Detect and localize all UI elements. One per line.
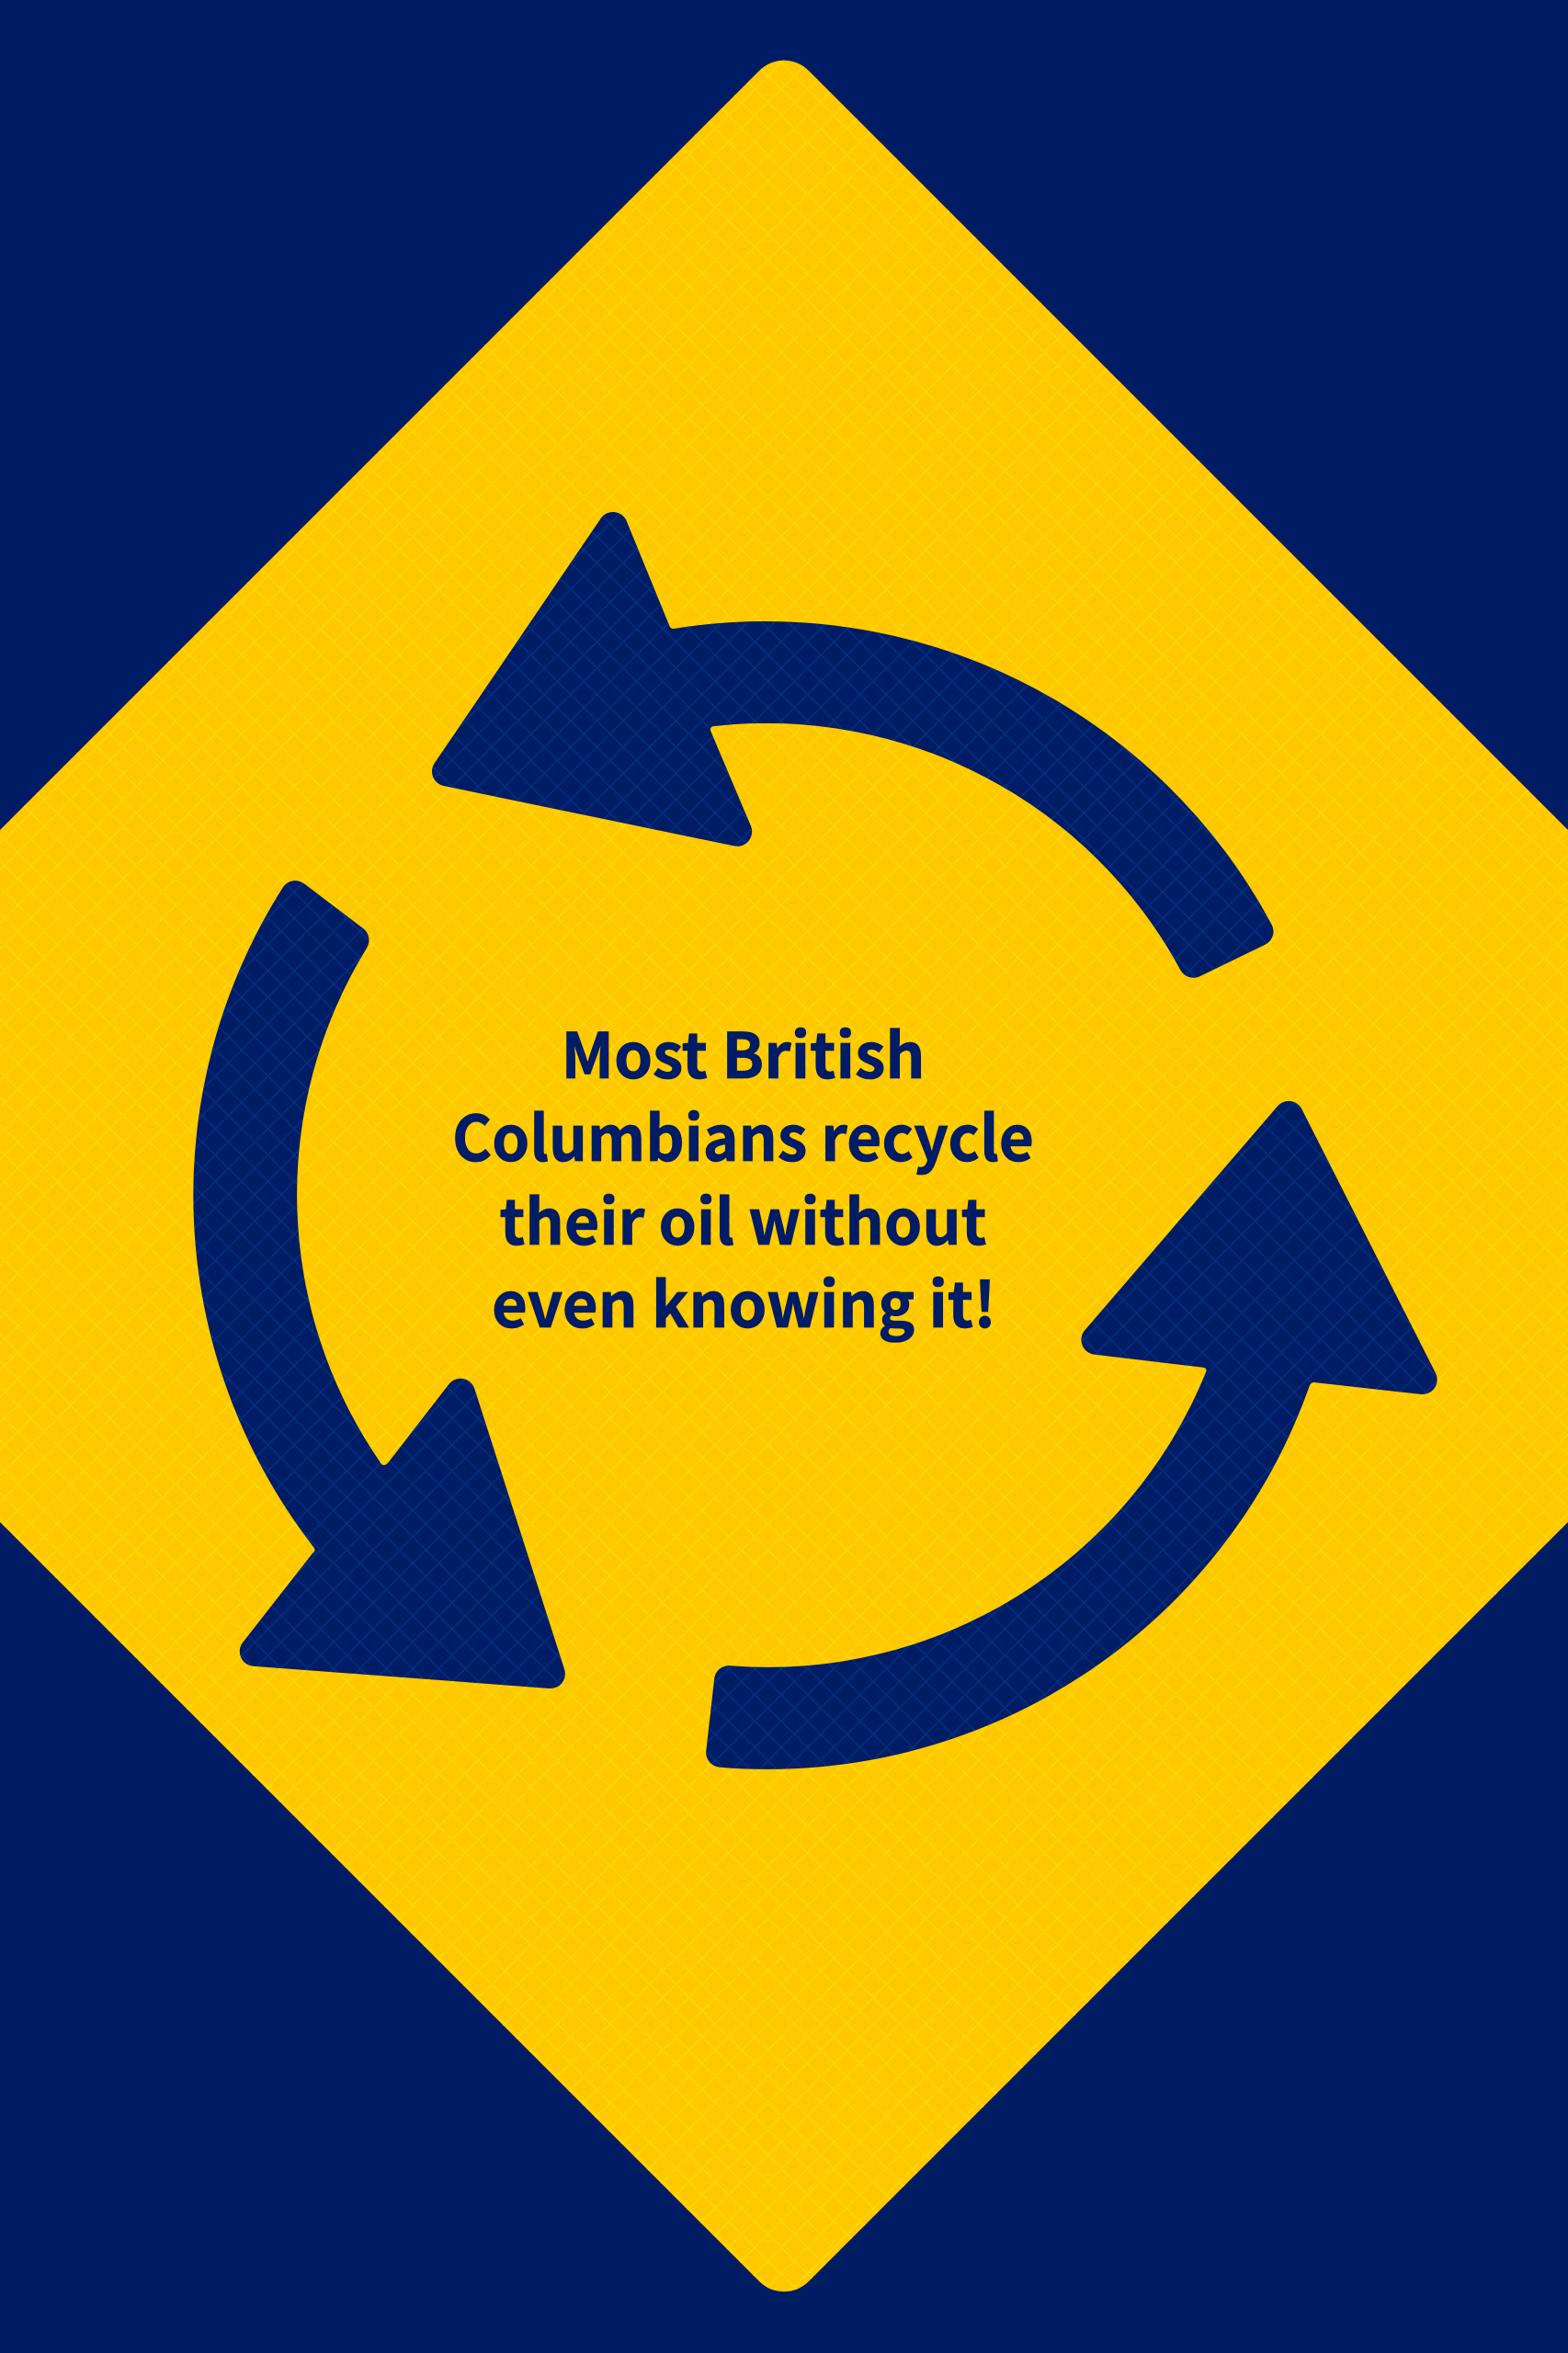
icon: top recycling arrow: [432, 512, 1273, 978]
central message text: even knowing it!: [492, 1255, 996, 1346]
icon: left recycling arrow: [193, 881, 565, 1688]
icon: lower right recycling arrow: [706, 1101, 1437, 1769]
central message text: Columbians recycle: [452, 1088, 1034, 1179]
central message text: [452, 1006, 1034, 1346]
central message text: their oil without: [500, 1172, 987, 1263]
central message text: Most British: [561, 1006, 925, 1097]
